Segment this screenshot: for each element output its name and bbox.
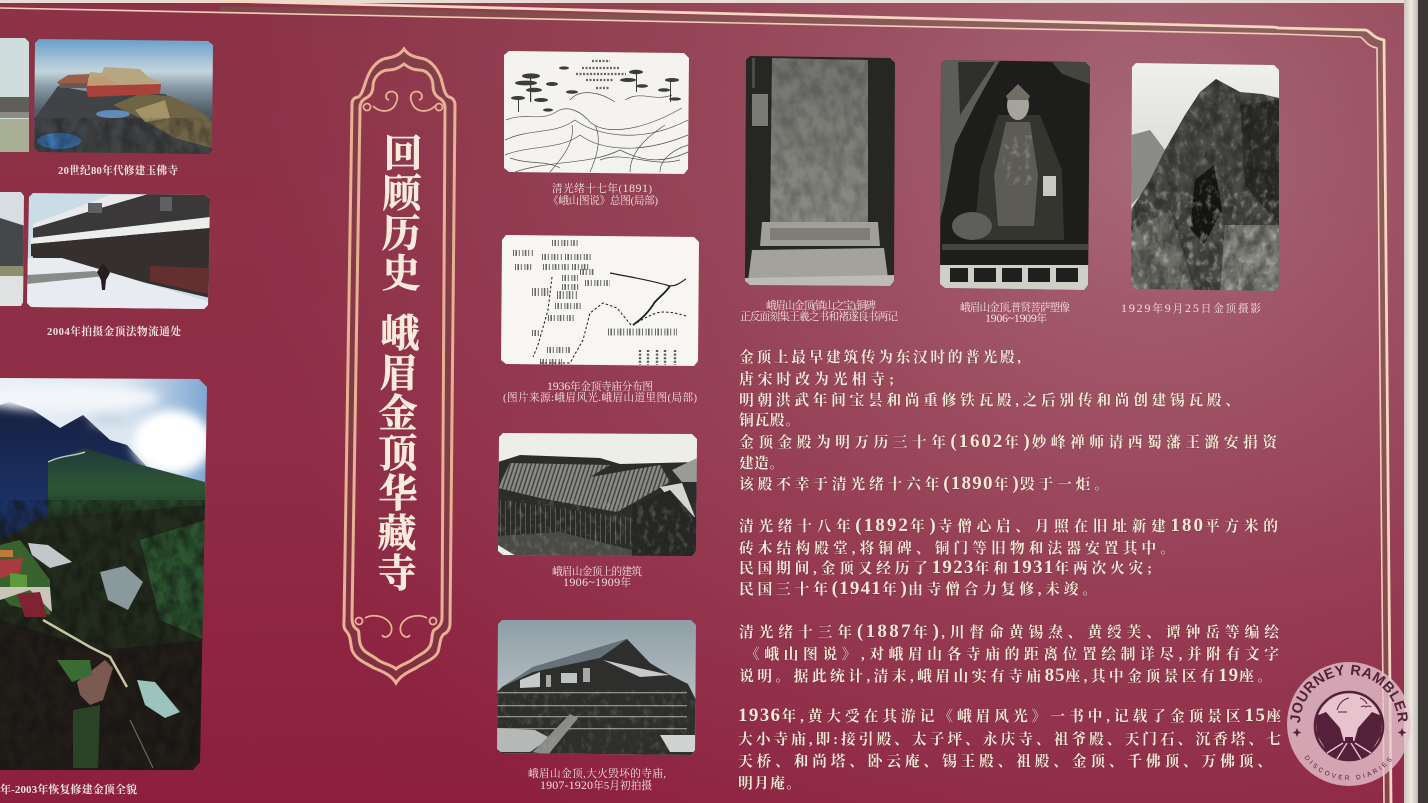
text block: 1887 survey: 说明。据此统计,清末,峨眉山实有寺庙85座,其中金顶景区有19座。 xyxy=(739,665,1275,686)
watermark: Journey Rambler badge xyxy=(1287,662,1411,786)
title text: 回顾历史 峨眉金顶华藏寺: 史 xyxy=(381,253,421,296)
text block: 1936 record: 明月庵。 xyxy=(738,774,804,792)
panel: vertical title plaque xyxy=(344,49,455,683)
photo: Samantabhadra statue xyxy=(940,60,1091,292)
text block: earliest buildings and golden hall: 明朝洪武年间宝昙和尚重修铁瓦殿,之后别传和尚创建锡瓦殿、 xyxy=(739,391,1243,409)
caption: Qing Guangxu 17th year sketch xyxy=(548,181,658,207)
caption: stele: 峨眉山金顶(镇山之宝),铜碑 xyxy=(766,299,876,312)
caption: 2003 restoration view: 年-2003年恢复修建金顶全貌 xyxy=(0,782,137,796)
photo: bronze stele xyxy=(745,56,896,287)
text block: earliest buildings and golden hall: 该殿不幸于清光绪十六年(1890年)毁于一炬。 xyxy=(739,473,1112,494)
text block: rebuilding in 1892: 民国三十年(1941年)由寺僧合力复修,未竣。 xyxy=(739,578,1100,599)
panel: left photo column xyxy=(0,38,214,796)
photo: summit cliff, 1929 xyxy=(1131,63,1280,292)
text block: rebuilding in 1892 xyxy=(739,515,1281,599)
title text: 回顾历史 峨眉金顶华藏寺: 藏 xyxy=(377,513,417,556)
caption: statue: 1906~1909年 xyxy=(985,311,1047,325)
text block: earliest buildings and golden hall: 铜瓦殿。 xyxy=(739,411,803,429)
title text: 回顾历史 峨眉金顶华藏寺: 峨 xyxy=(380,313,421,356)
caption: burned temple: 峨眉山金顶,大火毁坏的寺庙, xyxy=(528,767,666,780)
caption: buildings on the summit: 峨眉山金顶上的建筑 xyxy=(552,565,642,578)
panel: middle historic images xyxy=(497,51,700,792)
image: buildings on the summit, 1906-1909 xyxy=(498,433,698,557)
text block: 1936 record: 1936年,黄大受在其游记《峨眉风光》一书中,记载了金顶景区15座 xyxy=(738,705,1284,726)
caption: buildings on the summit: 1906~1909年 xyxy=(563,575,631,589)
text block: 1936 record: 大小寺庙,即:接引殿、太子坪、永庆寺、祖爷殿、天门石、沉香塔、七 xyxy=(738,730,1284,748)
photo: aerial view of Jinding xyxy=(0,378,212,772)
badge tagline: DISCOVER DIARIES xyxy=(1304,755,1392,780)
photo: Yufo temple in the 1980s xyxy=(34,39,214,155)
photo: temple fragment, top left xyxy=(0,38,30,153)
text block: earliest buildings and golden hall: 金顶上最早建筑传为东汉时的普光殿, xyxy=(739,348,1024,366)
image: 1936 hand-drawn temple distribution map xyxy=(501,235,700,367)
title text: 回顾历史 峨眉金顶华藏寺: 回 xyxy=(383,133,423,176)
caption: burned temple xyxy=(528,767,666,792)
photo: Jinding shop building in snow xyxy=(27,193,211,310)
caption: 1936 distribution map source xyxy=(503,379,697,404)
text block: rebuilding in 1892: 民国期间,金顶又经历了1923年和1931年两次火灾; xyxy=(739,557,1155,578)
caption: 1936 distribution map source: (图片来源:峨眉风光.峨眉山道里图(局部) xyxy=(503,391,697,404)
caption: 20th century 80s: 20世纪80年代修建玉佛寺 xyxy=(58,164,178,177)
panel: history text xyxy=(738,348,1284,792)
title text: 回顾历史 峨眉金顶华藏寺: 历 xyxy=(381,213,421,256)
caption: 1929 photo: 1929年9月25日金顶摄影 xyxy=(1121,301,1261,315)
title text: 回顾历史 峨眉金顶华藏寺: 顾 xyxy=(382,173,423,216)
title text: 回顾历史 峨眉金顶华藏寺 xyxy=(377,133,423,596)
title text: 回顾历史 峨眉金顶华藏寺: 眉 xyxy=(379,353,419,396)
image: burned temple, 1907-1920 xyxy=(497,620,697,756)
image: Qing sketch of Mount Emei xyxy=(504,51,690,175)
text block: 1936 record: 天桥、和尚塔、卧云庵、锡王殿、祖殿、金顶、千佛顶、万佛顶、 xyxy=(738,752,1275,770)
text block: rebuilding in 1892: 清光绪十八年(1892年)寺僧心启、月照在旧址新建180平方米的 xyxy=(739,515,1281,536)
caption: stele xyxy=(740,299,898,323)
text block: 1887 survey xyxy=(739,621,1282,686)
badge emblem: mountain road xyxy=(1315,692,1383,760)
caption: statue: 峨眉山金顶,普贤菩萨塑像 xyxy=(960,301,1070,314)
caption: Qing Guangxu 17th year sketch: 《峨山图说》总图(局部) xyxy=(548,194,658,207)
title text: 回顾历史 峨眉金顶华藏寺: 金 xyxy=(378,393,418,436)
caption: 1936 distribution map source: 1936年金顶寺庙分布图 xyxy=(547,379,653,393)
caption: buildings on the summit xyxy=(552,565,642,589)
plaque ornamental frame xyxy=(344,49,455,683)
photo: building fragment, second row xyxy=(0,192,25,307)
text block: earliest buildings and golden hall: 金顶金殿为明万历三十年(1602年)妙峰禅师请西蜀藩王潞安捐资 xyxy=(739,431,1280,452)
text block: earliest buildings and golden hall xyxy=(739,348,1280,494)
caption: 2004 photo: 2004年拍摄金顶法物流通处 xyxy=(47,325,182,338)
title text: 回顾历史 峨眉金顶华藏寺: 顶 xyxy=(378,433,419,476)
panel: top right photographs xyxy=(740,56,1280,325)
caption: statue xyxy=(960,301,1070,325)
caption: burned temple: 1907-1920年5月初拍摄 xyxy=(540,778,652,792)
caption: stele: 正反面刻集王羲之书和褚遂良书两记 xyxy=(740,310,898,323)
text block: 1887 survey: 《峨山图说》,对峨眉山各寺庙的距离位置绘制详尽,并附有文字 xyxy=(745,645,1282,663)
text block: earliest buildings and golden hall: 唐宋时改为光相寺; xyxy=(739,370,897,388)
text block: 1936 record xyxy=(738,705,1284,792)
badge stars xyxy=(1292,728,1406,737)
title text: 回顾历史 峨眉金顶华藏寺: 华 xyxy=(378,473,418,516)
text block: rebuilding in 1892: 砖木结构殿堂,将铜碑、铜门等旧物和法器安置其中。 xyxy=(739,539,1178,557)
badge ring text: JOURNEY RAMBLER xyxy=(1290,664,1408,723)
caption: Qing Guangxu 17th year sketch: 清光绪十七年(1891) xyxy=(552,181,652,195)
text block: 1887 survey: 清光绪十三年(1887年),川督命黄锡焘、黄绶芙、谭钟岳等编绘 xyxy=(739,621,1282,642)
title text: 回顾历史 峨眉金顶华藏寺: 寺 xyxy=(377,553,417,596)
text block: earliest buildings and golden hall: 建造。 xyxy=(739,454,787,472)
